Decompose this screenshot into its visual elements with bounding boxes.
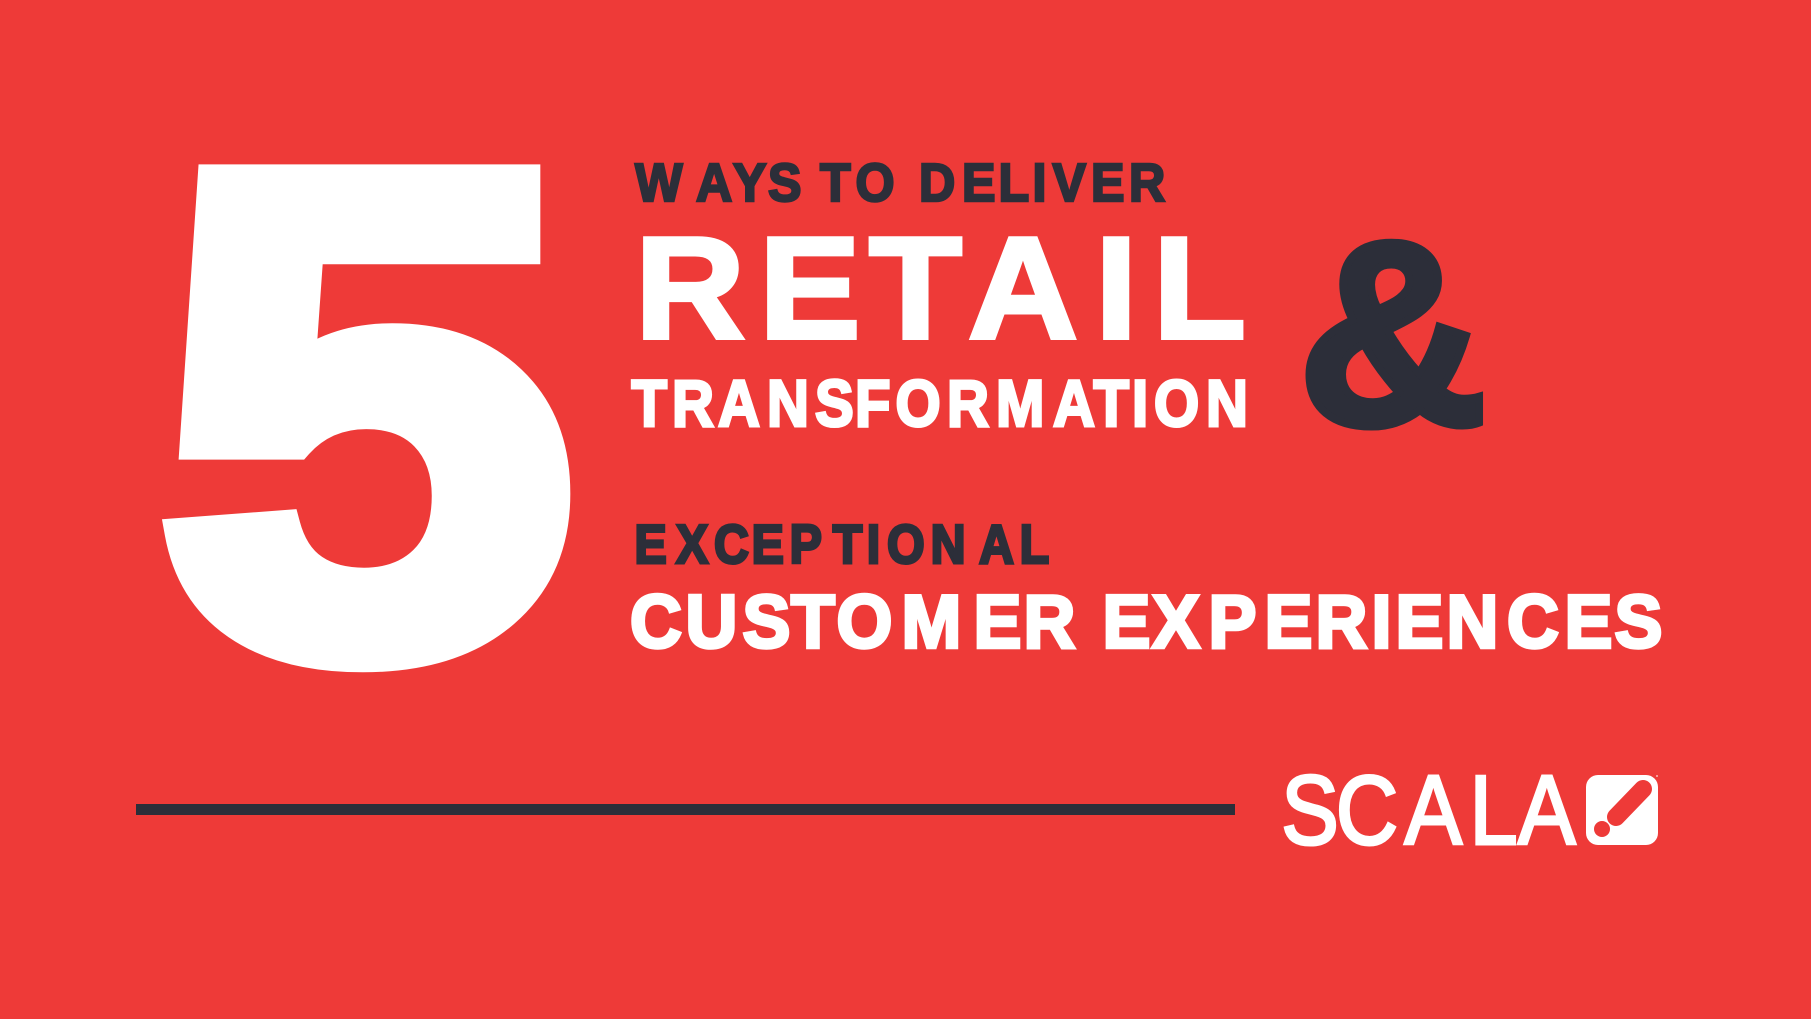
heading: customer experiences: CUSTOMER EXPERIENCES xyxy=(630,579,1662,664)
heading: retail: RETAIL xyxy=(635,206,1246,369)
ampersand: & xyxy=(1298,187,1487,480)
heading: ways to deliver: WAYS TO DELIVER xyxy=(635,153,1165,213)
logo icon xyxy=(1586,775,1658,845)
logo wordmark: SCALA xyxy=(1281,755,1576,865)
logo: scala xyxy=(1281,755,1658,865)
big numeral 5: 5 xyxy=(158,31,575,797)
heading: exceptional: EXCEPTIONAL xyxy=(635,513,1049,575)
heading: transformation: TRANSFORMATION xyxy=(631,368,1248,441)
divider line xyxy=(136,804,1235,815)
